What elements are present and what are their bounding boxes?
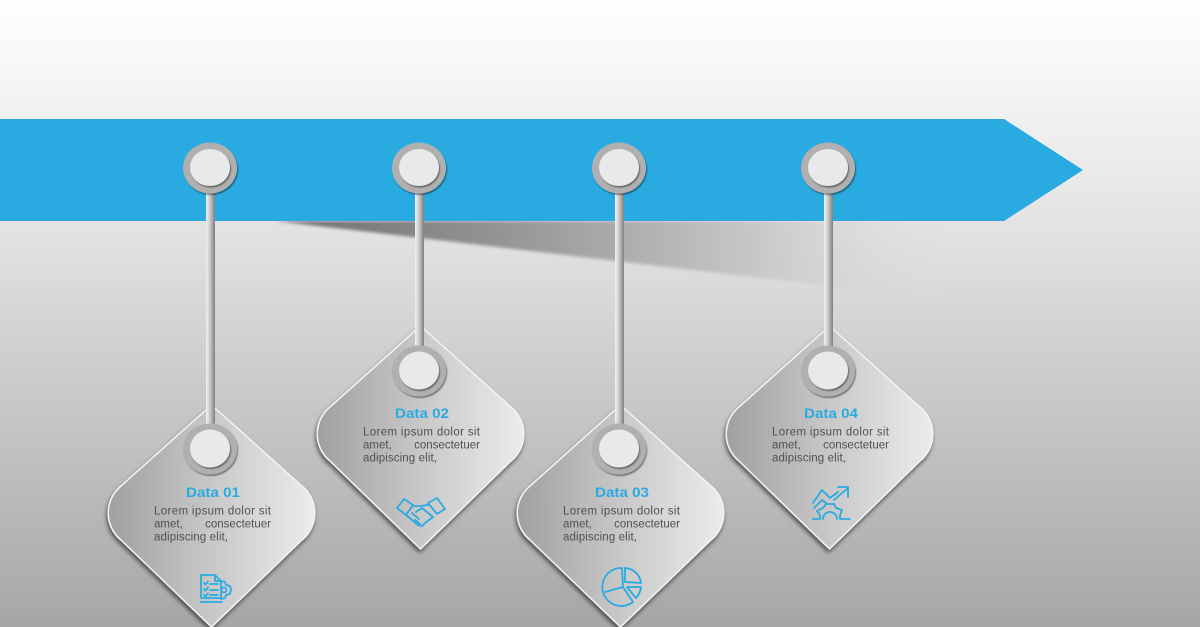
card 4: Data 04	[726, 326, 933, 549]
card 2: Data 02	[317, 326, 524, 549]
body text 2	[363, 426, 481, 464]
body text 3: adipiscing elit,	[563, 532, 637, 544]
pin lower 2	[392, 346, 446, 396]
heading 1: Data 01	[186, 484, 240, 500]
body text 1: consectetuer	[205, 518, 271, 530]
pin top 1	[183, 142, 237, 194]
body text 4: adipiscing elit,	[772, 452, 846, 464]
body text 4: amet,	[772, 440, 801, 452]
diamond panel 3	[517, 405, 724, 627]
stem 1	[206, 190, 215, 426]
icon: checklist with gear	[201, 575, 231, 602]
diamond panel 4	[726, 326, 933, 549]
pin top 4	[801, 142, 855, 194]
icon: pie chart	[602, 568, 641, 606]
card 1: Data 01	[108, 405, 315, 627]
heading 3: Data 03	[595, 484, 649, 500]
body text 1	[154, 506, 272, 544]
pin top 2	[392, 142, 446, 194]
body text 2: Lorem ipsum dolor sit	[363, 426, 481, 438]
body text 4: Lorem ipsum dolor sit	[772, 426, 890, 438]
body text 1: amet,	[154, 518, 183, 530]
body text 2: adipiscing elit,	[363, 452, 437, 464]
body text 3: amet,	[563, 518, 592, 530]
body text 4: consectetuer	[823, 440, 889, 452]
stem 4	[824, 190, 833, 348]
body text 2: amet,	[363, 440, 392, 452]
blue banner arrow	[0, 119, 1083, 221]
pin lower 4	[801, 346, 855, 396]
heading 4: Data 04	[804, 405, 858, 421]
body text 4	[772, 426, 890, 464]
icon: handshake	[397, 498, 445, 526]
diamond panel 1	[108, 405, 315, 627]
banner arrow shadow	[275, 221, 950, 300]
body text 1: adipiscing elit,	[154, 532, 228, 544]
icon: growth arrow and gear	[813, 487, 850, 519]
stem 2	[415, 190, 424, 348]
pin lower 3	[592, 424, 646, 474]
pin lower 1	[183, 424, 237, 474]
pin top 3	[592, 142, 646, 194]
body text 2: consectetuer	[414, 440, 480, 452]
body text 3: consectetuer	[614, 518, 680, 530]
body text 1: Lorem ipsum dolor sit	[154, 506, 272, 518]
diamond panel 2	[317, 326, 524, 549]
body text 3: Lorem ipsum dolor sit	[563, 506, 681, 518]
card 3: Data 03	[517, 405, 724, 627]
stem 3	[615, 190, 624, 426]
body text 3	[563, 506, 681, 544]
heading 2: Data 02	[395, 405, 449, 421]
